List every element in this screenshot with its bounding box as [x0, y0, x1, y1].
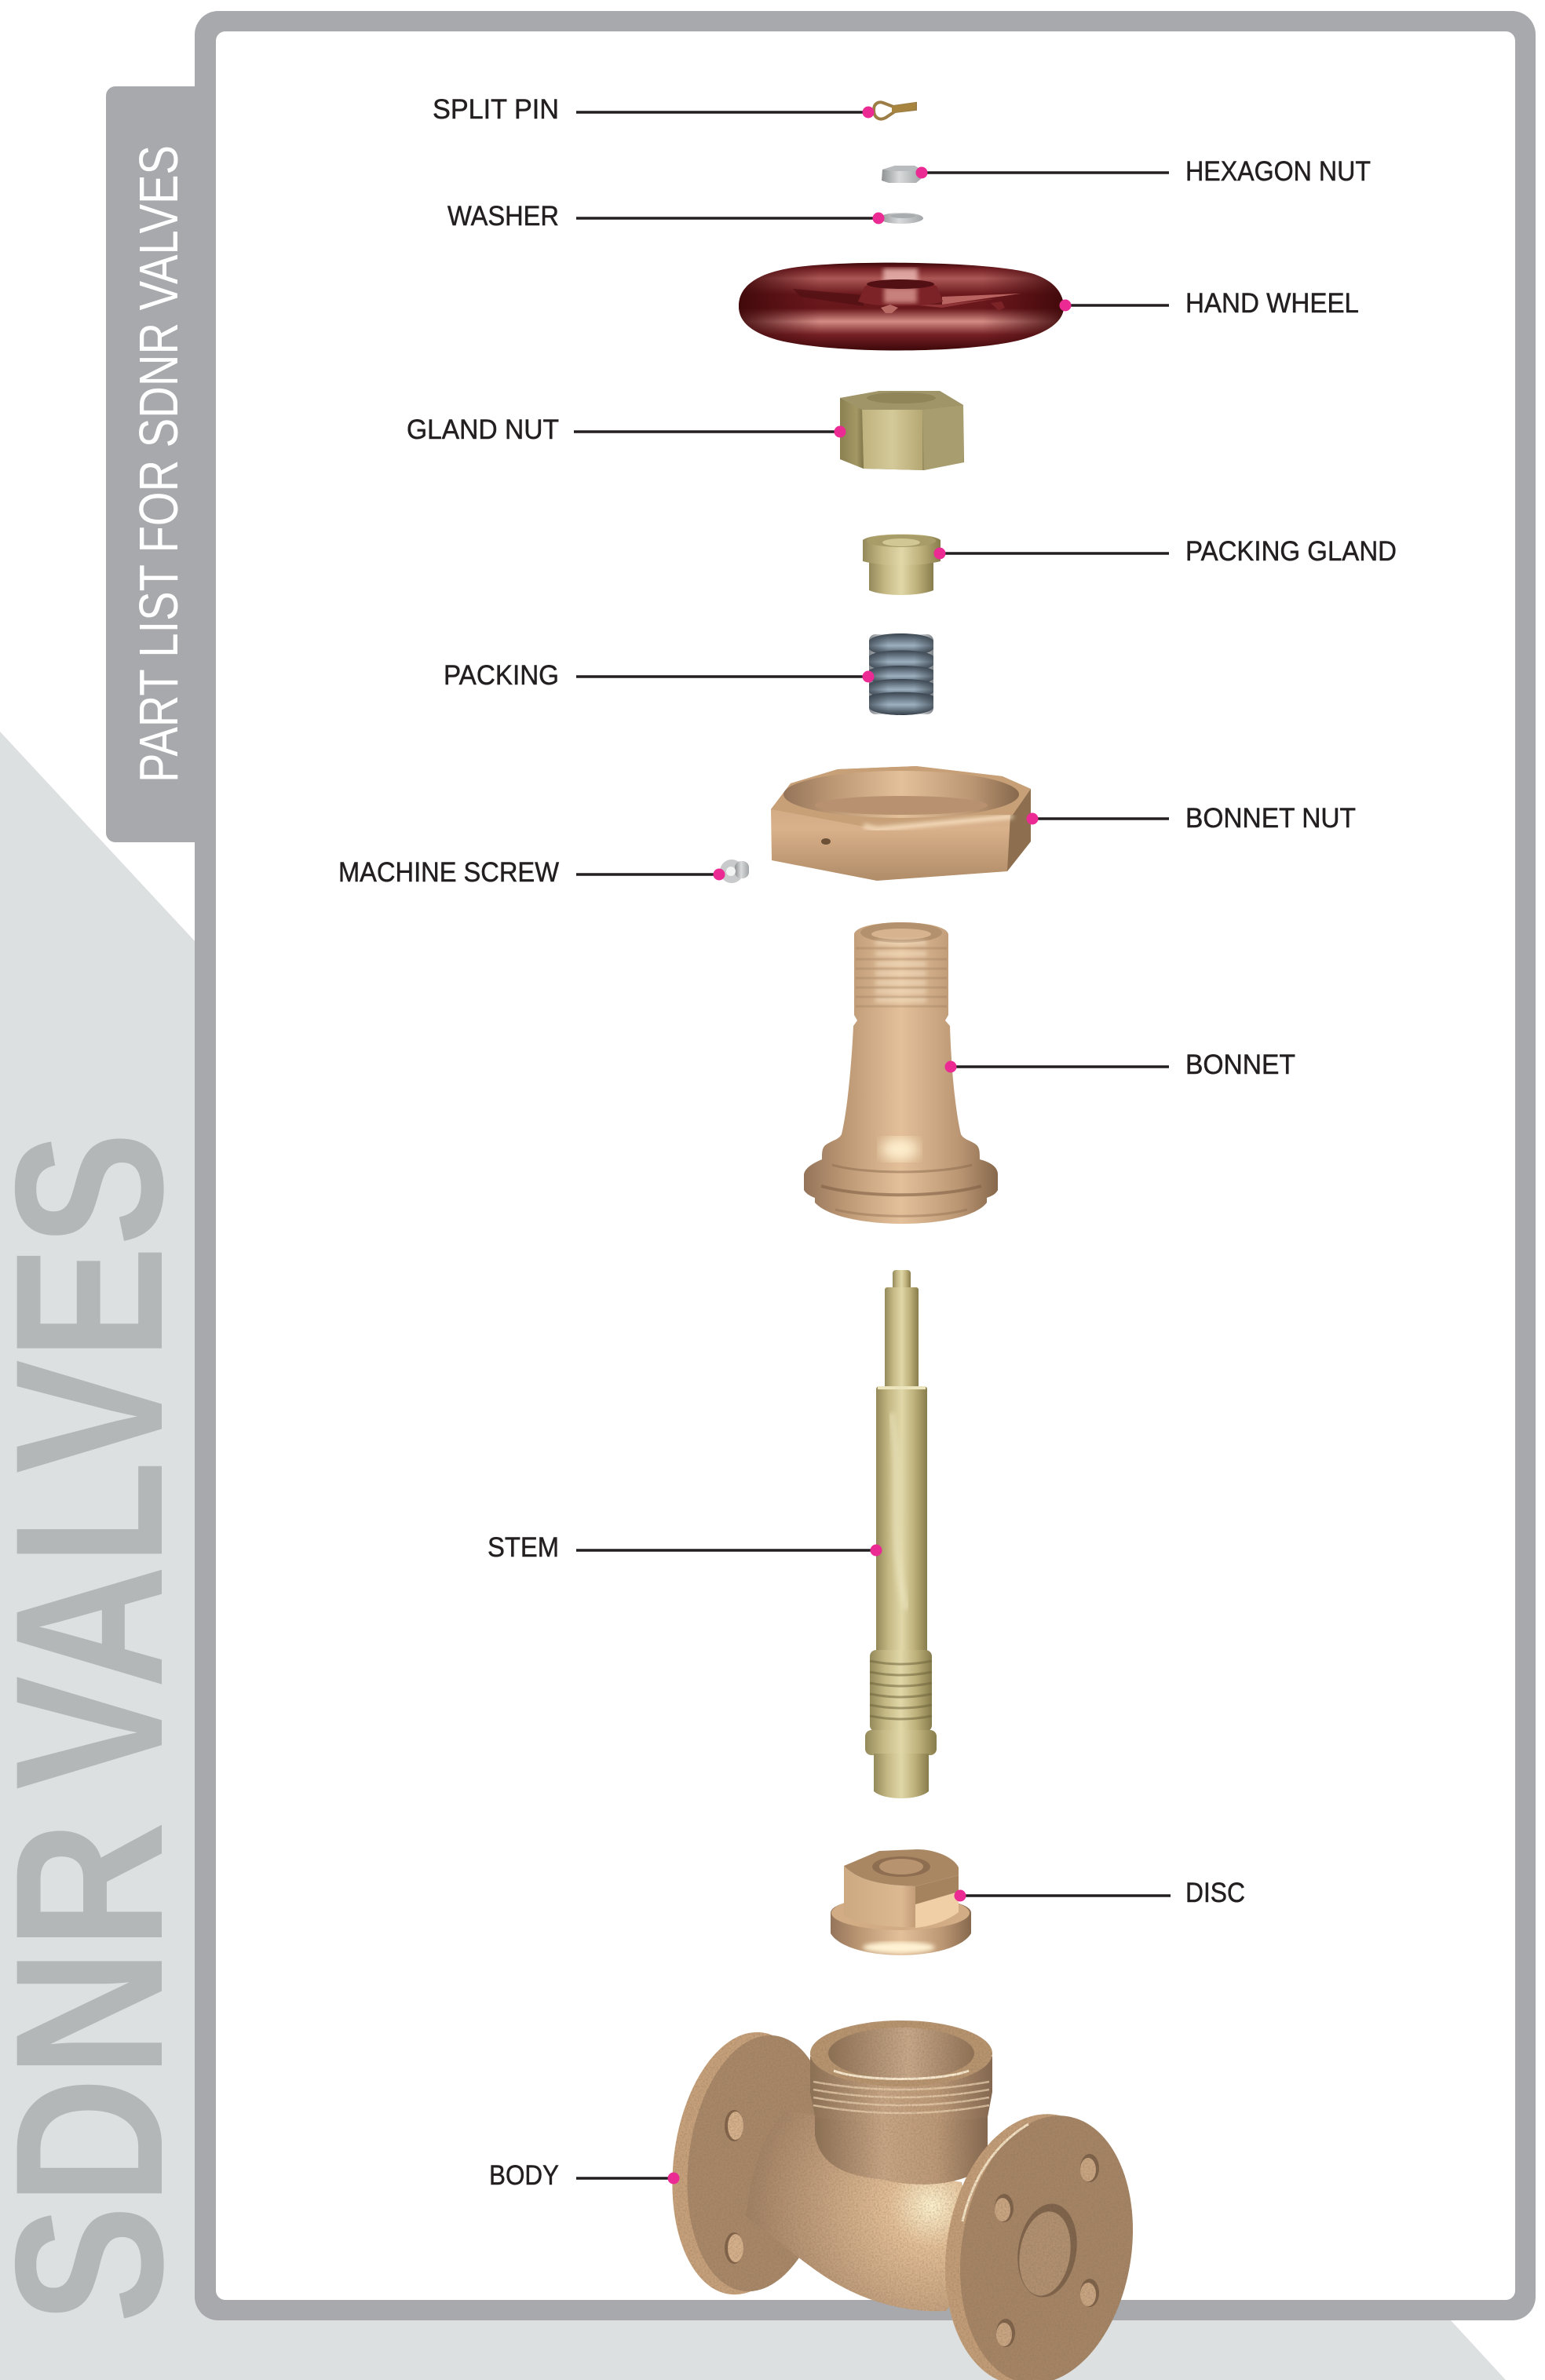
part: stem [865, 1270, 937, 1798]
callout: packing gland: PACKING GLAND [1185, 536, 1397, 567]
side tab with heading [106, 86, 216, 842]
callout: bonnet nut [1027, 803, 1356, 834]
part: valve body [658, 2020, 1152, 2380]
callout: bonnet [945, 1049, 1295, 1080]
part: washer [879, 213, 923, 224]
part: packing rings [869, 633, 933, 715]
rear flange [658, 2024, 845, 2303]
callout: packing: PACKING [444, 660, 559, 691]
callout: stem: STEM [488, 1532, 559, 1563]
part: hexagon nut [882, 166, 921, 183]
callout: disc: DISC [1185, 1878, 1245, 1908]
part: split pin [874, 102, 915, 119]
background light grey wedge [0, 732, 1506, 2380]
callout: gland nut: GLAND NUT [407, 414, 559, 445]
callout: stem [488, 1532, 882, 1563]
callout: split pin [433, 94, 875, 125]
part: bonnet [804, 922, 998, 1224]
neck [810, 2020, 992, 2185]
callout: hexagon nut [915, 156, 1371, 187]
callout: hand wheel [1060, 288, 1359, 319]
callout: gland nut [407, 414, 846, 445]
callout: body [489, 2160, 680, 2191]
callout: hand wheel: HAND WHEEL [1185, 288, 1359, 319]
part: gland nut [840, 391, 964, 470]
callout: bonnet: BONNET [1185, 1049, 1295, 1080]
callout: hexagon nut: HEXAGON NUT [1185, 156, 1371, 187]
large vertical watermark title [0, 1132, 206, 2323]
elbow [746, 2110, 973, 2311]
part: bonnet nut [771, 766, 1031, 881]
callout: machine screw [338, 857, 725, 888]
callout: split pin: SPLIT PIN [433, 94, 559, 125]
part: packing gland [863, 534, 941, 595]
callout: packing gland [934, 536, 1397, 567]
callout: packing [444, 660, 875, 691]
part: hand wheel [739, 263, 1064, 350]
callout: disc [955, 1878, 1245, 1908]
callout: body: BODY [489, 2160, 559, 2191]
heading: PART LIST FOR SDNR VALVES [128, 145, 189, 783]
callout: machine screw: MACHINE SCREW [338, 857, 559, 888]
part: machine screw [720, 860, 749, 883]
callout: washer: WASHER [447, 201, 559, 232]
part: disc [831, 1849, 971, 1955]
front flange [926, 2101, 1152, 2380]
callout: bonnet nut: BONNET NUT [1185, 803, 1356, 834]
callout: washer [447, 201, 884, 232]
